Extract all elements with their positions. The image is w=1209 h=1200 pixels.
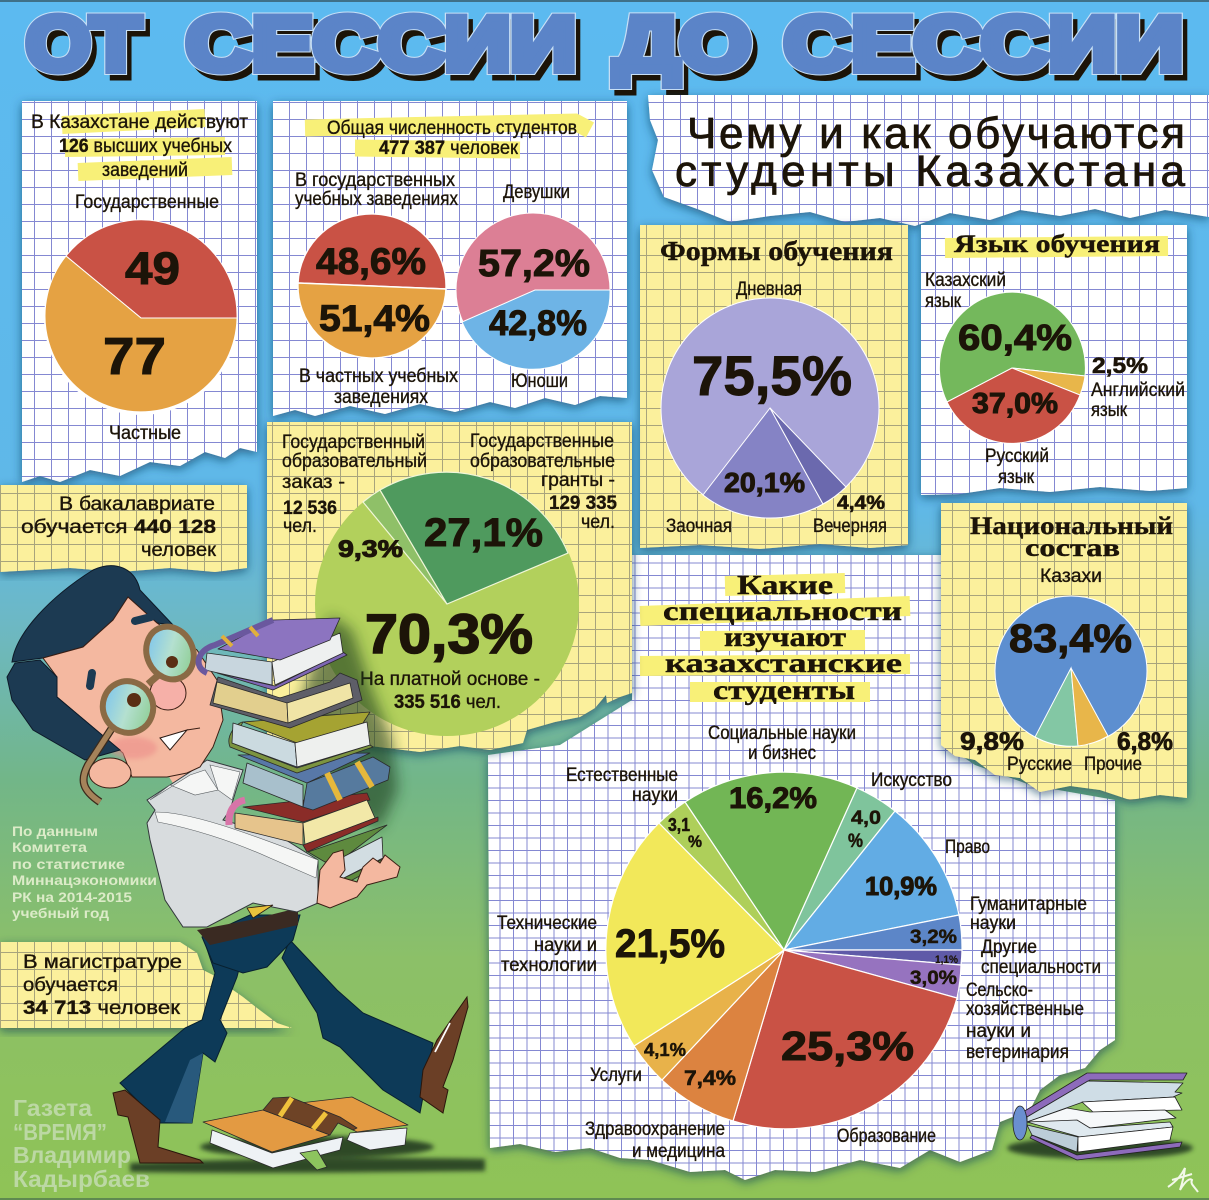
labels: funding: образовательный (282, 451, 427, 472)
labels: nationality: Казахи (1040, 566, 1102, 587)
percentages: specialties: 4,0 (851, 808, 881, 829)
front leg (282, 940, 433, 1113)
pie: institutions (44, 220, 238, 415)
title: ОТ (31, 8, 146, 93)
text: credit: Владимир (13, 1142, 131, 1168)
book: gray cream (210, 673, 362, 728)
labels: specialties: Искусство (871, 770, 952, 791)
labels: specialties: и медицина (632, 1141, 725, 1162)
text: institutions count: Частные (109, 423, 181, 444)
labels: language (925, 270, 1185, 488)
labels: language: Казахский (925, 270, 1006, 291)
percentages: specialties: 4,1% (644, 1040, 686, 1060)
book: purple (217, 652, 347, 690)
text: institutions count: Государственные (75, 192, 219, 213)
text: students labels: Юноши (511, 371, 568, 392)
labels: forms: Заочная (666, 516, 732, 537)
pie: institution type (298, 214, 446, 358)
labels: nationality: 9,8% (960, 728, 1024, 756)
percentages: specialties: 10,9% (865, 871, 937, 901)
text: institutions count: 126 высших учебных (59, 136, 232, 157)
signature (1168, 1168, 1198, 1192)
labels: specialties: специальности (981, 957, 1101, 978)
text: credit: Газета (13, 1095, 92, 1121)
labels: specialties: технологии (501, 955, 597, 976)
panel: master: обучается (23, 975, 118, 996)
percentages: specialties: 3,0% (910, 968, 957, 989)
text: source note: По данным (12, 823, 98, 839)
labels: specialties: Услуги (590, 1065, 642, 1086)
text: students labels: В частных учебных (299, 366, 458, 387)
panel: forms of study (640, 225, 908, 549)
pie: funding: 70,3% (365, 602, 533, 665)
belt buckle (247, 905, 273, 918)
text: students labels: Девушки (503, 182, 570, 203)
title: ОТ (26, 2, 141, 87)
panel: header subtitle: Чему и как обучаются (687, 109, 1185, 158)
heading: specialties: казахстанские (665, 648, 902, 678)
text: source note: Миннацэкономики (12, 872, 157, 888)
title: СЕССИИ (186, 2, 576, 87)
pie: gender (456, 213, 610, 369)
title: СЕССИИ (191, 8, 581, 93)
percentages: specialties (615, 782, 958, 1090)
pie: funding: На платной основе - (360, 669, 540, 690)
back leg (120, 937, 243, 1123)
pie: funding: 335 516 чел. (394, 692, 501, 713)
panel: nationality (941, 503, 1187, 800)
hair: upper lobe (12, 566, 173, 662)
pie: language: 60,4% (958, 317, 1072, 358)
labels: funding (282, 431, 617, 537)
percentages: specialties: 1,1% (935, 954, 958, 966)
labels: specialties: науки (970, 913, 1016, 934)
labels: specialties: Сельско- (966, 980, 1033, 1001)
ear (89, 758, 131, 788)
title: ДО (614, 2, 751, 87)
labels: funding: 129 335 (549, 493, 617, 514)
book: red (243, 793, 370, 822)
text: students labels (295, 118, 577, 408)
labels: language: язык (1091, 400, 1128, 421)
text: students labels: Общая численность студентов (327, 118, 577, 139)
labels: specialties: Естественные (566, 765, 678, 786)
panel: institutions (22, 101, 257, 482)
panel: header subtitle (648, 95, 1209, 226)
pie: institutions: 49 (125, 243, 180, 294)
belt (197, 908, 298, 945)
pie: forms: 75,5% (692, 344, 852, 407)
labels: specialties: и бизнес (748, 743, 816, 764)
illustration: student carrying books (7, 566, 485, 1173)
title: ОТ (26, 2, 141, 87)
cheek (109, 737, 157, 759)
panel: master: В магистратуре (23, 952, 182, 973)
heading: nationality: Национальный (970, 513, 1173, 540)
labels: specialties (497, 723, 1101, 1162)
back shoe (113, 1090, 203, 1163)
labels: language: 2,5% (1092, 353, 1148, 378)
eyebrows (90, 617, 151, 686)
pie: nationality (995, 596, 1147, 746)
panel: bachelor: обучается 440 128 (21, 517, 216, 538)
labels: specialties: Другие (981, 937, 1037, 958)
heading: language: Язык обучения (954, 231, 1160, 258)
text: institutions count: В Казахстане действуют (31, 112, 248, 133)
pie: language: 37,0% (972, 388, 1058, 420)
percentages: specialties: 21,5% (615, 922, 725, 966)
icon: open book (1007, 1073, 1193, 1160)
hip (202, 915, 300, 973)
labels: funding: Государственные (470, 431, 614, 452)
panel: bachelor: В бакалавриате (59, 494, 215, 515)
labels: funding: образовательные (470, 451, 615, 472)
heading: specialties: изучают (724, 622, 846, 652)
pie: institution type: 48,6% (316, 241, 426, 282)
text: source note: учебный год (12, 905, 109, 921)
labels: funding: гранты - (541, 470, 615, 491)
labels: nationality: 6,8% (1117, 728, 1173, 756)
book: green (308, 825, 387, 862)
neck (165, 762, 200, 795)
labels: nationality (960, 566, 1173, 775)
text: students labels: 477 387 человек (379, 138, 519, 159)
percentages: specialties: 7,4% (684, 1067, 736, 1090)
labels: funding: 12 536 (283, 498, 337, 519)
percentages: specialties: 25,3% (781, 1023, 914, 1069)
text: students labels: учебных заведениях (295, 189, 458, 210)
pie: forms (661, 298, 879, 518)
text: institutions count: заведений (102, 160, 188, 181)
book stack (199, 618, 390, 884)
labels: language: Английский (1091, 380, 1185, 401)
percentages: specialties: % (848, 831, 863, 852)
labels: nationality: Русские (1007, 754, 1072, 775)
mouth (160, 730, 187, 750)
labels: specialties: Гуманитарные (970, 894, 1087, 915)
labels: funding: чел. (581, 512, 615, 533)
pie: institution type: 51,4% (319, 298, 430, 339)
pie: gender: 57,2% (478, 243, 590, 285)
labels: funding: чел. (283, 516, 317, 537)
labels: forms (666, 279, 887, 537)
labels: specialties: Здравоохранение (585, 1119, 725, 1140)
pie: institutions: 77 (103, 328, 166, 386)
text: students labels: заведениях (334, 387, 428, 408)
percentages: specialties: % (688, 832, 702, 851)
stack shadow (300, 615, 398, 830)
text: source note: Комитета (12, 839, 87, 855)
pie: funding: 27,1% (424, 511, 543, 555)
labels: specialties: ветеринария (966, 1042, 1069, 1063)
hair: lower lobe (7, 660, 120, 760)
heading: nationality: состав (1025, 535, 1120, 562)
panel: bachelor (0, 485, 247, 572)
heading: nationality (970, 513, 1173, 562)
labels: nationality: Прочие (1084, 754, 1142, 775)
panel: master: 34 713 человек (23, 998, 181, 1019)
heading: specialties (663, 570, 902, 705)
text: credit (13, 1095, 150, 1192)
panel: funding (267, 422, 632, 752)
text: source note: РК на 2014-2015 (12, 889, 132, 905)
text: students labels: В государственных (295, 170, 455, 191)
book: blue (238, 753, 370, 783)
percentages: specialties: 16,2% (729, 782, 817, 815)
panel: header subtitle: студенты Казахстана (675, 147, 1186, 196)
text: source note (12, 823, 157, 921)
text: credit: “ВРЕМЯ” (13, 1119, 107, 1145)
nose (150, 676, 186, 710)
title: СЕССИИ (784, 2, 1183, 87)
title: СЕССИИ (186, 2, 576, 87)
heading: specialties: студенты (713, 675, 855, 705)
labels: language: язык (998, 467, 1035, 488)
labels: forms: 4,4% (837, 493, 885, 514)
labels: language: Русский (985, 446, 1049, 467)
labels: specialties: науки и (966, 1021, 1031, 1042)
heading: specialties: специальности (663, 596, 902, 626)
pie: gender: 42,8% (489, 304, 587, 343)
labels: specialties: Право (945, 837, 990, 858)
title (26, 2, 1188, 93)
pie: funding: 9,3% (338, 536, 403, 563)
face (43, 597, 223, 777)
labels: specialties: Социальные науки (708, 723, 856, 744)
pie: forms: 20,1% (724, 467, 805, 498)
labels: specialties: науки (632, 785, 678, 806)
panel: bachelor: человек (141, 540, 217, 561)
pie: specialties (606, 772, 962, 1129)
panel: students total (273, 101, 627, 416)
labels: forms: Дневная (736, 279, 802, 300)
percentages: specialties: 3,1 (668, 815, 690, 835)
pie: language (939, 292, 1085, 443)
shirt (147, 760, 318, 927)
panel: specialties (488, 555, 1115, 1180)
heading: specialties: Какие (737, 570, 833, 600)
title: ДО (619, 8, 756, 93)
panel: master (0, 942, 292, 1028)
labels: language: язык (925, 291, 962, 312)
text: institutions count (31, 112, 248, 444)
text: credit: Кадырбаев (13, 1166, 150, 1192)
labels: specialties: хозяйственные (966, 999, 1084, 1020)
pie: funding (315, 472, 579, 736)
heading: forms: Формы обучения (660, 236, 893, 266)
back leg highlight (165, 1053, 203, 1123)
pie: nationality: 83,4% (1009, 617, 1132, 661)
title: СЕССИИ (789, 8, 1188, 93)
book on floor (203, 1097, 408, 1170)
labels: specialties: Технические (497, 913, 597, 934)
shirt highlight (150, 765, 318, 878)
floor shadow (130, 1136, 485, 1173)
text: source note: по статистике (12, 856, 125, 872)
glasses (84, 619, 202, 802)
labels: specialties: науки и (534, 935, 597, 956)
panel: language (921, 225, 1187, 495)
front shoe (420, 997, 468, 1113)
labels: forms: Вечерняя (813, 516, 887, 537)
title: ДО (614, 2, 751, 87)
labels: specialties: Образование (837, 1126, 936, 1147)
hand (317, 850, 400, 908)
labels: funding: Государственный (282, 432, 425, 453)
book: olive (229, 722, 373, 773)
labels: funding: заказ - (282, 472, 345, 493)
percentages: specialties: 3,2% (910, 927, 957, 948)
title: СЕССИИ (784, 2, 1183, 87)
